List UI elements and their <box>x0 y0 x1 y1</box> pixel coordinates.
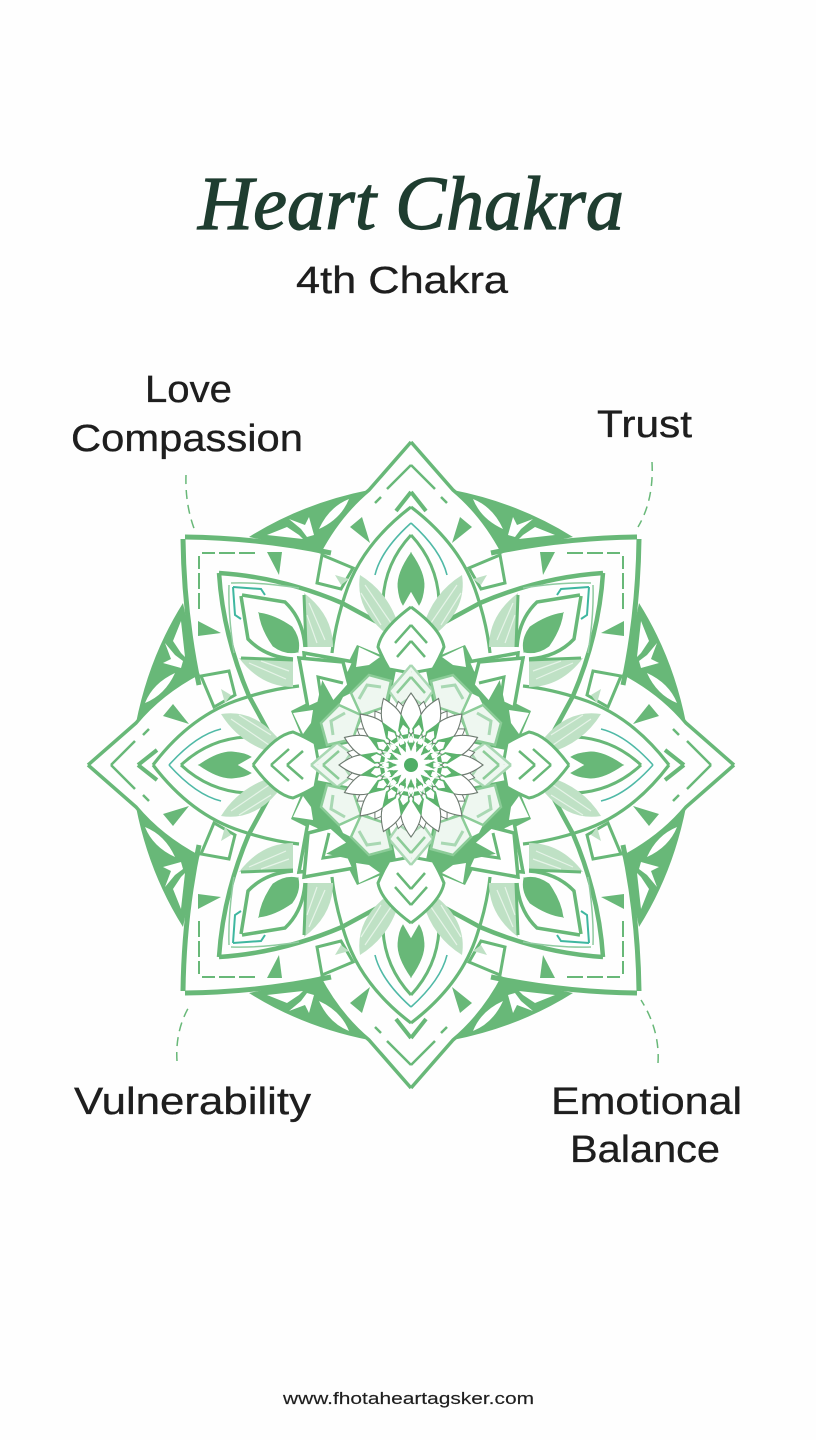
mandala petals <box>88 442 734 1088</box>
connector: emotional balance <box>641 1000 658 1063</box>
label: emotional balance: Emotional <box>551 1081 742 1123</box>
label: trust: Trust <box>597 404 692 446</box>
centre flower <box>329 683 493 847</box>
label: love compassion: Compassion <box>71 418 303 460</box>
website footer: www.fhotaheartagsker.com <box>282 1389 534 1408</box>
label: emotional balance <box>551 1081 742 1171</box>
mandala <box>88 442 734 1088</box>
label: love compassion <box>71 369 303 460</box>
title: Heart Chakra <box>197 162 624 246</box>
label: emotional balance: Balance <box>570 1129 720 1171</box>
connector: trust <box>638 462 652 527</box>
connector: vulnerability <box>177 1005 190 1061</box>
label: vulnerability: Vulnerability <box>74 1081 311 1123</box>
label: love compassion: Love <box>145 369 232 411</box>
connector: love compassion <box>186 475 195 531</box>
subtitle: 4th Chakra <box>296 260 509 302</box>
